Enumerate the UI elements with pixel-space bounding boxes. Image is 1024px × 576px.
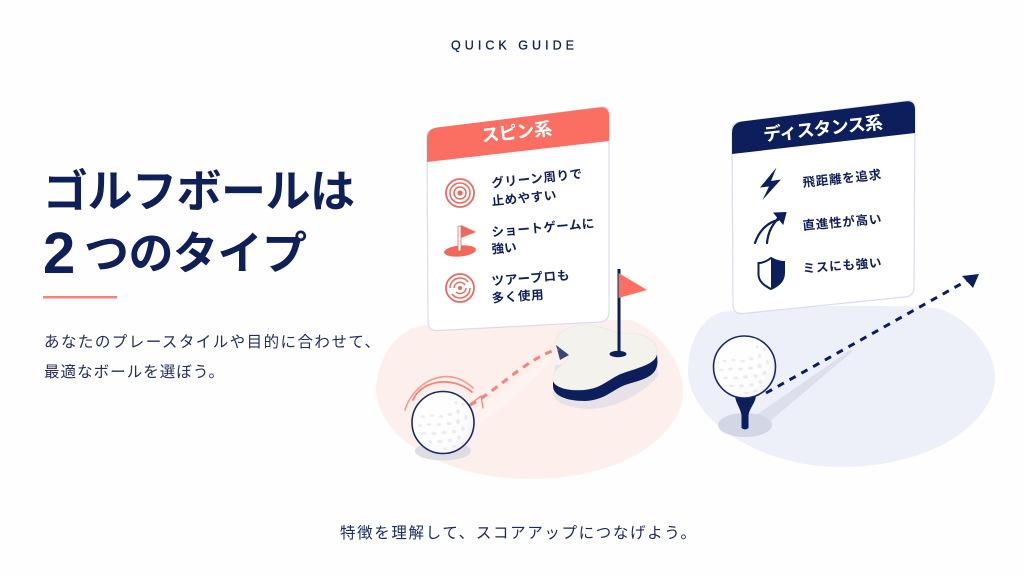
feature text: tour pro <box>491 268 570 305</box>
arrow head <box>962 274 979 288</box>
flag pole <box>618 269 620 354</box>
feature text: forgiveness: ミスにも強い <box>802 255 882 276</box>
icon: shield <box>758 258 784 289</box>
heading: ゴルフボールは <box>43 166 355 217</box>
feature text: straightness: 直進性が高い <box>802 211 882 233</box>
icon: curved arrow <box>755 212 786 243</box>
tee <box>735 396 756 430</box>
intro text: 最適なボールを選ぼう。 <box>44 363 224 381</box>
card title: ディスタンス系 <box>762 112 884 145</box>
feature text: tour pro: ツアープロも <box>491 268 570 288</box>
green shadow <box>553 360 658 409</box>
feature text: green: グリーン周りで <box>491 166 583 190</box>
icon: spin target <box>446 274 474 302</box>
spin ball motion <box>405 348 560 460</box>
spin card <box>427 107 609 331</box>
golf ball <box>412 392 474 454</box>
feature text: tour pro: 多く使用 <box>491 287 544 305</box>
intro text: あなたのプレースタイルや目的に合わせて、 <box>44 333 380 351</box>
ground: distance blob <box>688 306 995 467</box>
kicker: QUICK GUIDE: QUICK GUIDE <box>451 38 574 52</box>
icon: flag on green <box>444 225 476 258</box>
tee shot <box>714 274 979 437</box>
card title: スピン系 <box>480 119 553 146</box>
card body <box>732 101 915 314</box>
shadow streak <box>752 350 853 428</box>
feature text: short game <box>491 216 595 256</box>
heading: 2 <box>43 221 75 286</box>
intro text <box>44 333 380 381</box>
feature text: short game: 強い <box>491 240 517 256</box>
feature text: green: 止めやすい <box>491 187 557 208</box>
hole notch <box>556 345 569 360</box>
green side <box>553 353 658 401</box>
dashed trajectory <box>766 280 968 393</box>
icon: target <box>446 179 474 207</box>
feature text: short game: ショートゲームに <box>491 216 595 239</box>
tee shadow <box>718 413 772 437</box>
heading <box>43 166 355 286</box>
card header <box>427 107 609 162</box>
green top <box>553 325 657 390</box>
flag <box>618 273 647 298</box>
shadow <box>415 442 471 460</box>
hole <box>610 351 626 357</box>
card header <box>732 101 915 154</box>
putting green <box>553 269 658 409</box>
footer message: 特徴を理解して、スコアアップにつなげよう。 <box>340 524 696 542</box>
feature text: distance: 飛距離を追求 <box>802 167 882 190</box>
distance card <box>732 101 915 314</box>
ground: spin blob <box>376 320 683 479</box>
feature text: green <box>491 166 583 208</box>
dashed trajectory <box>470 350 555 405</box>
motion streak <box>474 348 560 425</box>
icon: lightning bolt <box>760 168 781 200</box>
heading underline <box>43 296 117 298</box>
spin arcs <box>405 377 483 410</box>
card body <box>427 107 609 331</box>
golf ball <box>714 336 776 398</box>
heading: つのタイプ <box>84 228 307 279</box>
